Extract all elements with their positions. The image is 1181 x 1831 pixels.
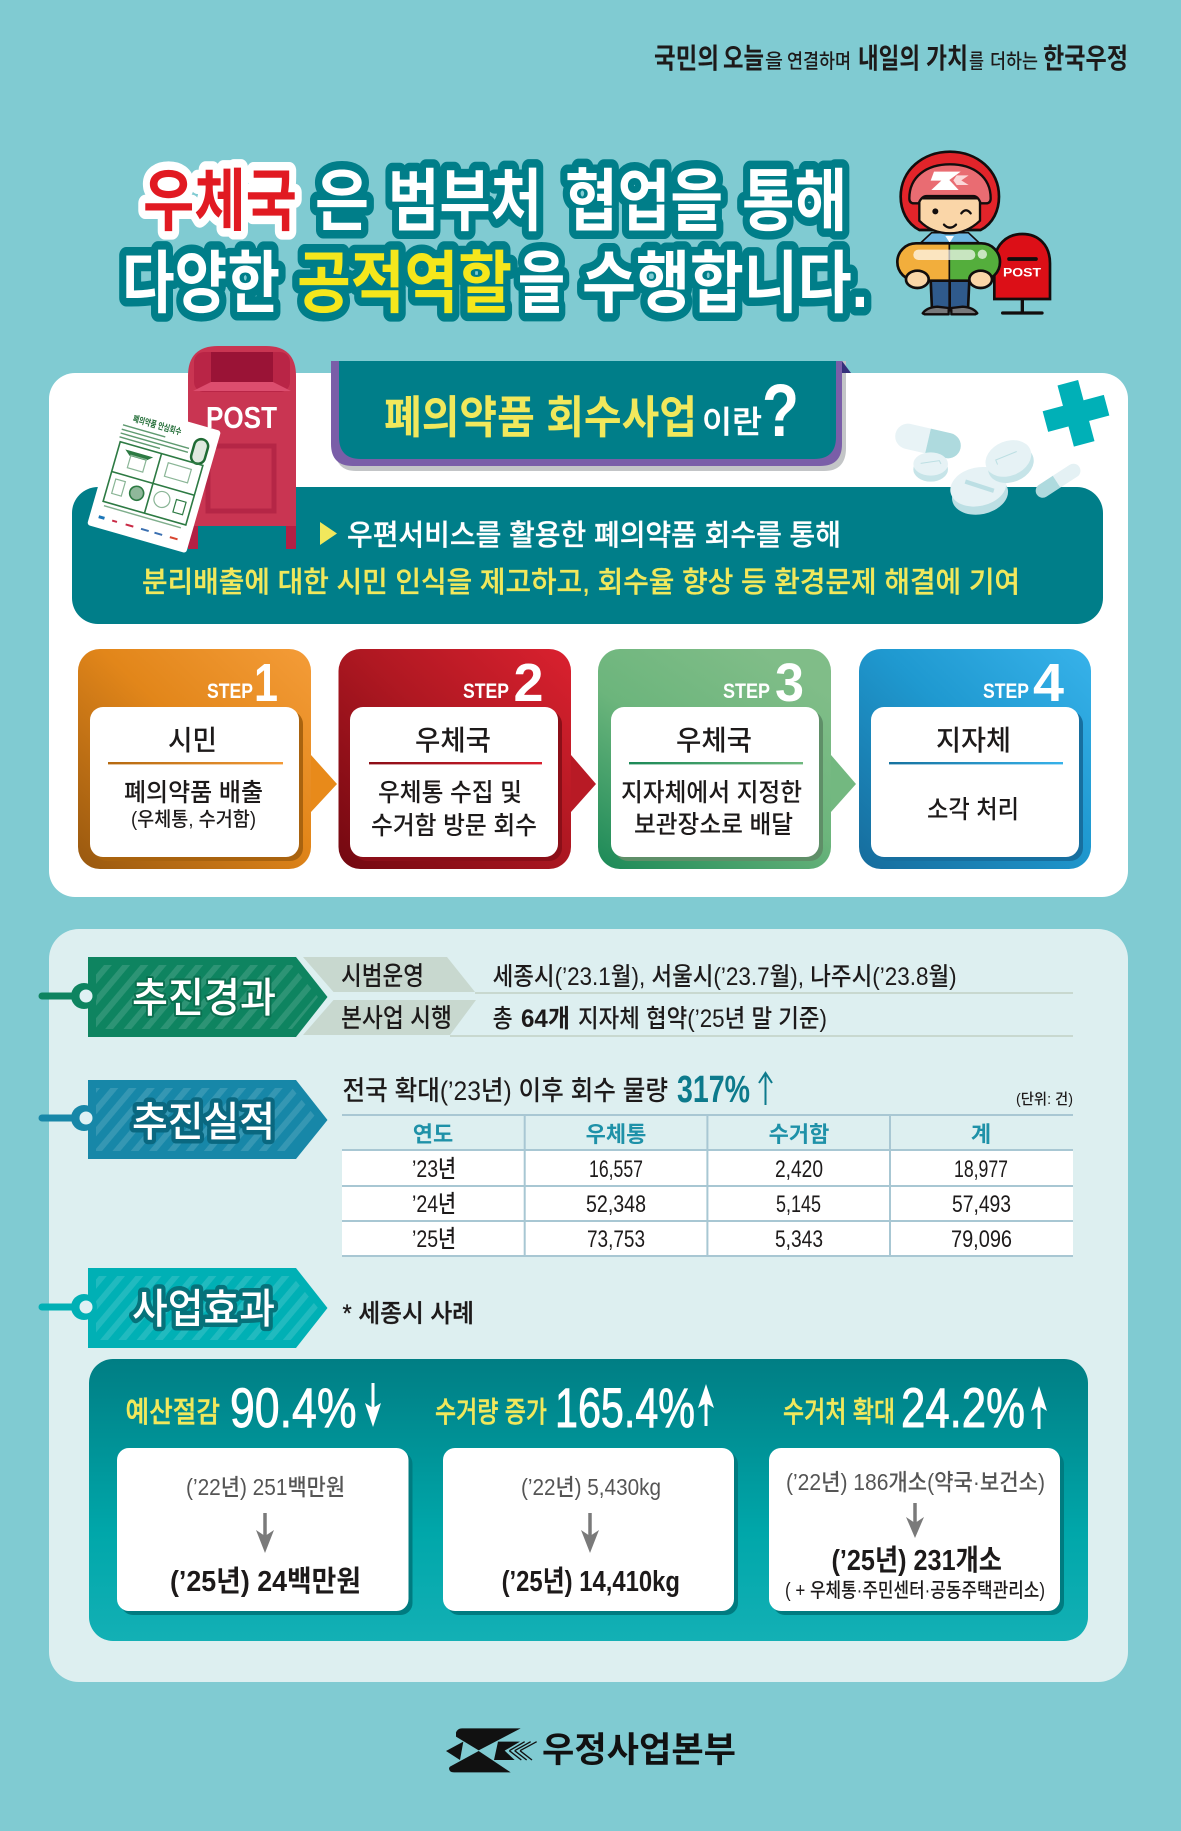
effect: budget saving: (’22년) 251백만원 xyxy=(186,1474,345,1500)
tag: progress result xyxy=(42,957,328,1037)
title: 협업을 xyxy=(565,164,723,240)
effect: collection points expansion: (’25년) 231개소 xyxy=(832,1544,1002,1577)
tagline: 오늘 xyxy=(723,43,764,74)
table: collection volume: 5,343 xyxy=(775,1226,823,1253)
pilot label and description: 시범운영 xyxy=(341,961,424,991)
title: 범부처 xyxy=(388,164,542,240)
tagline: 국민의 xyxy=(654,43,719,74)
step 2: 2 xyxy=(514,653,544,713)
logo: postal service mark and name xyxy=(446,1728,736,1772)
heading banner: what is the drug recovery program: ? xyxy=(762,369,799,452)
table: collection volume: 16,557 xyxy=(589,1156,643,1183)
effect: collection increase: 수거량 증가 xyxy=(435,1396,547,1429)
tag: business effect: 사업효과 xyxy=(132,1286,275,1332)
title: 은 xyxy=(315,164,369,240)
panel: intro banner xyxy=(72,487,1103,624)
legs xyxy=(931,280,969,310)
step 3: 보관장소로 배달 xyxy=(634,811,793,839)
collar xyxy=(921,233,979,243)
full rollout label and description: 지자체 협약(’25년 말 기준) xyxy=(578,1005,827,1033)
effect: budget saving: 예산절감 xyxy=(126,1396,220,1429)
step 1: (우체통, 수거함) xyxy=(131,808,256,831)
step 1: 시민 xyxy=(168,725,217,756)
step 4 xyxy=(859,649,1091,869)
tagline: 연결하며 xyxy=(787,50,851,73)
table: collection volume: 5,145 xyxy=(776,1191,821,1218)
icon: leaflet: 폐의약품 안심회수 xyxy=(132,413,183,437)
title: 공적역할 xyxy=(297,246,512,322)
table: collection volume: 52,348 xyxy=(586,1191,646,1218)
table: collection volume: 18,977 xyxy=(954,1156,1008,1183)
step 1 xyxy=(78,649,337,869)
icon: leaflet xyxy=(87,403,221,553)
step 3: 3 xyxy=(775,653,804,713)
panel: intro banner: 분리배출에 대한 시민 인식을 제고하고, 회수율 향상 등 환경문제 해결에 기여 xyxy=(142,566,1020,599)
table: collection volume xyxy=(342,1115,1073,1256)
step 4: STEP xyxy=(983,680,1029,703)
step 3 xyxy=(598,649,856,869)
tagline: 한국우정 xyxy=(1043,43,1128,74)
heading banner: what is the drug recovery program: 이란 xyxy=(702,405,762,440)
panel: effect figures xyxy=(89,1359,1088,1641)
tagline: 을 xyxy=(765,51,783,73)
step 2: 우체국 xyxy=(415,725,491,756)
table: collection volume: 73,753 xyxy=(587,1226,645,1253)
title: 통해 xyxy=(742,164,847,240)
pilot label and description: 세종시(’23.1월), 서울시(’23.7월), 나주시(’23.8월) xyxy=(493,963,957,991)
tag: performance xyxy=(42,1080,328,1159)
step 2: STEP xyxy=(463,680,509,703)
tagline xyxy=(654,43,1128,74)
performance heading: 317% xyxy=(677,1069,750,1111)
icon: postal mascot with pill and mailbox xyxy=(897,152,1050,314)
step 4: 지자체 xyxy=(936,725,1011,756)
effect: budget saving: 90.4% xyxy=(230,1376,356,1439)
heading banner: what is the drug recovery program: 폐의약품 회수사업 xyxy=(384,392,697,443)
table: collection volume: 2,420 xyxy=(775,1156,823,1183)
step 2: 우체통 수집 및 xyxy=(378,779,522,807)
logo: postal service mark and name: 우정사업본부 xyxy=(542,1731,736,1770)
icon: postal mascot with pill and mailbox: POST xyxy=(1003,266,1042,280)
step 3: 지자체에서 지정한 xyxy=(621,779,802,807)
effect: collection points expansion xyxy=(769,1376,1064,1615)
full rollout label and description: 총 xyxy=(493,1005,513,1033)
title: 을 xyxy=(518,246,565,322)
effect: collection points expansion: ( + 우체통·주민센터·공동주택관리소) xyxy=(785,1579,1045,1602)
pill xyxy=(897,243,949,281)
tag: performance: 추진실적 xyxy=(132,1099,275,1145)
tagline: 를 xyxy=(969,51,984,73)
table: collection volume: 연도 xyxy=(413,1122,453,1147)
full rollout label and description xyxy=(303,1000,1073,1037)
effect: collection increase: (’25년) 14,410kg xyxy=(502,1565,680,1598)
title: 다양한 xyxy=(122,246,280,322)
table: collection volume: 수거함 xyxy=(769,1122,829,1147)
title: 수행합니다. xyxy=(582,246,868,322)
note: Sejong city case: * 세종시 사례 xyxy=(342,1300,474,1328)
step 1: 1 xyxy=(254,653,278,713)
tagline: 내일의 xyxy=(858,43,920,74)
full rollout label and description: 본사업 시행 xyxy=(341,1003,452,1033)
step 3: STEP xyxy=(723,680,770,703)
step 1: STEP xyxy=(207,680,253,703)
mailbox xyxy=(994,234,1050,313)
effect: collection points expansion: 24.2% xyxy=(901,1376,1025,1439)
helmet xyxy=(901,152,999,230)
table: collection volume: ’23년 xyxy=(412,1156,456,1183)
step 4: 소각 처리 xyxy=(927,796,1019,824)
table: collection volume: 79,096 xyxy=(951,1226,1012,1253)
panel: what is the program xyxy=(49,373,1128,897)
tagline: 더하는 xyxy=(990,50,1038,73)
full rollout label and description: 64개 xyxy=(521,1005,570,1033)
table: collection volume: 계 xyxy=(971,1122,991,1147)
tag: progress result: 추진경과 xyxy=(132,975,276,1021)
step 2: 수거함 방문 회수 xyxy=(371,812,537,840)
heading banner: what is the drug recovery program xyxy=(331,361,851,471)
effect: collection points expansion: 수거처 확대 xyxy=(783,1396,895,1429)
effect: collection increase: (’22년) 5,430kg xyxy=(521,1474,661,1500)
hands xyxy=(906,271,929,288)
panel: results xyxy=(49,929,1128,1682)
effect: budget saving xyxy=(117,1376,412,1615)
pilot label and description xyxy=(303,957,1073,994)
table: collection volume: 우체통 xyxy=(586,1122,646,1147)
tagline: 가치 xyxy=(926,43,968,74)
performance heading xyxy=(342,1069,1073,1111)
step 2 xyxy=(338,649,596,869)
table: collection volume: 57,493 xyxy=(952,1191,1011,1218)
effect: collection points expansion: (’22년) 186개소(약국·보건소) xyxy=(786,1469,1045,1495)
step 3: 우체국 xyxy=(676,725,752,756)
table: collection volume: ’25년 xyxy=(412,1226,456,1253)
table: collection volume: ’24년 xyxy=(412,1191,456,1218)
effect: collection increase xyxy=(435,1376,738,1615)
icon: large post box: POST xyxy=(206,400,277,435)
step 4: 4 xyxy=(1033,653,1064,713)
performance heading: 전국 확대(’23년) 이후 회수 물량 xyxy=(342,1076,668,1106)
icon: large post box xyxy=(188,346,296,549)
effect: collection increase: 165.4% xyxy=(555,1376,695,1439)
title: 우체국 xyxy=(143,164,297,240)
icon: pills and medical cross xyxy=(893,375,1115,520)
step 1: 폐의약품 배출 xyxy=(124,779,263,807)
title xyxy=(122,164,868,322)
panel: intro banner: 우편서비스를 활용한 폐의약품 회수를 통해 xyxy=(347,519,841,552)
effect: budget saving: (’25년) 24백만원 xyxy=(170,1565,361,1598)
performance heading: (단위: 건) xyxy=(1016,1091,1073,1108)
tag: business effect xyxy=(42,1268,328,1348)
